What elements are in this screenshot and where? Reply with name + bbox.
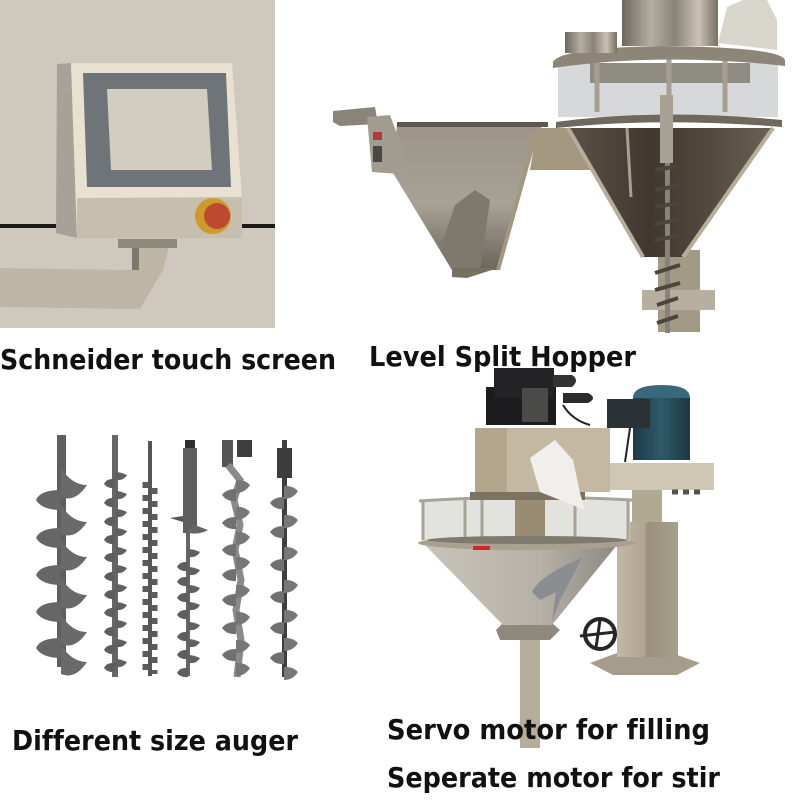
hopper bracket with switch xyxy=(367,115,412,175)
heading: hopper: Level Split Hopper xyxy=(369,340,636,373)
gearbox xyxy=(475,428,610,492)
post flange xyxy=(642,290,715,310)
motor arm xyxy=(610,463,714,490)
heading: touch screen: Schneider touch screen xyxy=(0,343,336,376)
central drive inside glass xyxy=(515,492,545,542)
wall backdrop xyxy=(0,0,275,328)
glass upright bars xyxy=(597,55,725,112)
cone reflection xyxy=(532,558,582,622)
clamp xyxy=(496,623,560,640)
sleeved auger xyxy=(170,440,208,677)
auger shaft upper xyxy=(660,95,673,163)
panel: filler machine photo xyxy=(418,368,714,748)
glass uprights xyxy=(423,497,628,540)
left hopper handle xyxy=(333,107,378,126)
heading: servo motor: Servo motor for filling xyxy=(387,713,710,746)
glass cylinder xyxy=(422,500,630,542)
housing side xyxy=(56,63,77,238)
hopper rim xyxy=(418,536,636,550)
support post upper xyxy=(632,490,662,525)
black horizontal line behind panel xyxy=(0,224,275,228)
servo motor xyxy=(486,368,593,425)
right hopper cone edges xyxy=(568,128,773,257)
screen bezel xyxy=(83,73,231,187)
auger shaft lower xyxy=(665,163,670,333)
support post main xyxy=(617,522,678,657)
gearbox side face xyxy=(475,428,507,492)
hopper cone xyxy=(425,545,617,625)
housing front xyxy=(71,63,242,238)
white bag xyxy=(718,0,777,50)
handwheel xyxy=(580,619,615,649)
left hopper rim xyxy=(397,122,548,127)
central column xyxy=(622,0,718,46)
housing lower face xyxy=(77,197,242,238)
stir motor xyxy=(607,385,690,462)
heading: stir motor: Seperate motor for stir xyxy=(387,761,720,794)
panel: level split hopper photo xyxy=(333,0,785,333)
white cloth xyxy=(530,440,585,510)
emergency stop button xyxy=(195,198,231,234)
base plate xyxy=(590,653,700,675)
twisted auger xyxy=(222,440,252,677)
lower rim ring xyxy=(556,114,782,128)
screen xyxy=(107,89,212,170)
large auger xyxy=(36,435,87,676)
collared auger xyxy=(270,440,298,680)
post below right hopper xyxy=(658,250,700,332)
red tag xyxy=(473,546,490,550)
arm mount plate xyxy=(118,239,177,248)
upper rim ring xyxy=(553,46,785,68)
left hopper cone xyxy=(393,123,547,270)
hopper connector bracket xyxy=(530,128,593,170)
glass darker band xyxy=(590,63,750,83)
medium auger xyxy=(104,435,127,677)
arm upright shadow xyxy=(132,246,139,270)
glass cylinder xyxy=(558,63,778,117)
auger flights xyxy=(655,166,680,323)
right hopper cone xyxy=(568,128,773,257)
thin auger xyxy=(146,441,154,676)
left hopper right edge xyxy=(498,130,537,270)
small can xyxy=(565,32,617,53)
panel: auger set photo xyxy=(36,435,298,680)
inner baffle rod xyxy=(627,128,631,197)
inner rim shadow xyxy=(427,536,627,544)
filling pipe xyxy=(520,640,540,748)
left hopper lower reflection xyxy=(440,190,490,270)
panel: Schneider touch screen photo xyxy=(0,0,275,328)
support arm xyxy=(0,243,170,309)
glass top rim xyxy=(419,497,632,501)
left hopper spout xyxy=(452,268,498,278)
gearbox collar xyxy=(470,492,585,500)
heading: auger: Different size auger xyxy=(12,724,298,757)
arm bolts xyxy=(672,490,700,494)
